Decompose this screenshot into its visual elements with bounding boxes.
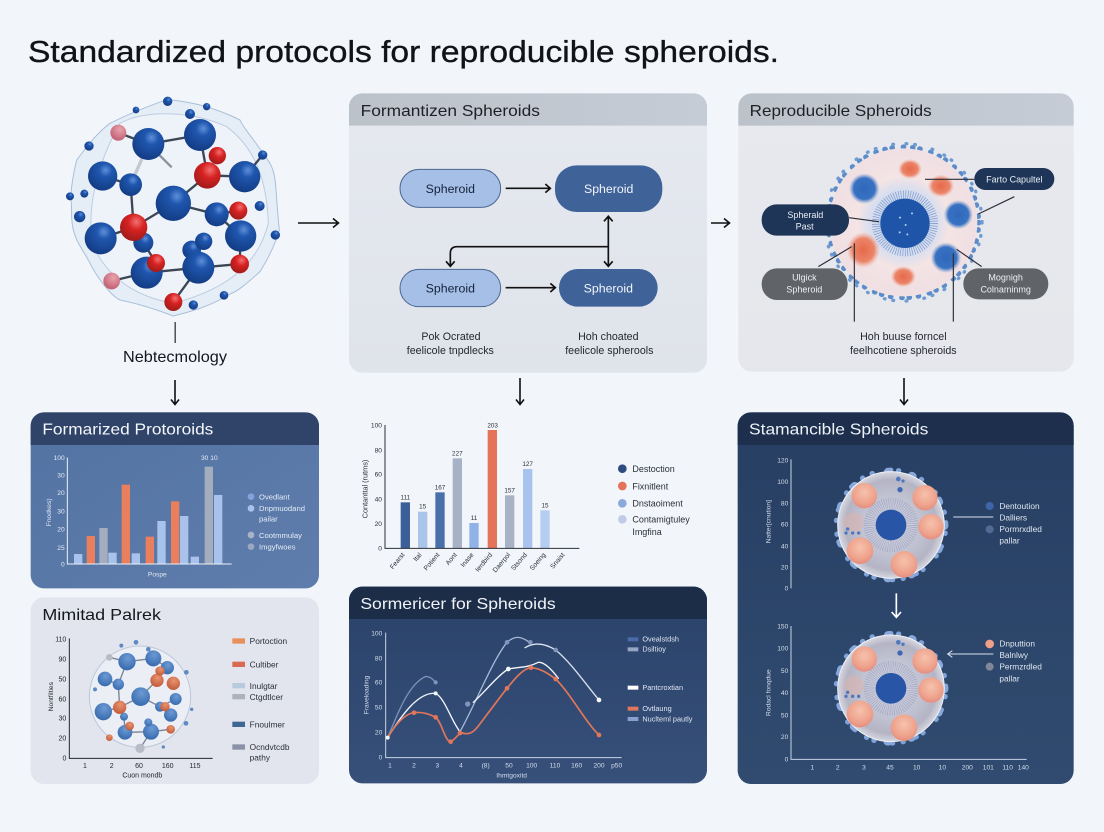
axes and labels: Snaist bbox=[549, 552, 567, 570]
callout: farto capultel: Farto Capultel bbox=[986, 174, 1043, 184]
lower chart axes: 150 bbox=[777, 623, 789, 630]
legend bbox=[232, 636, 290, 763]
axes and labels bbox=[361, 423, 579, 574]
legend: Ovealstdsh bbox=[642, 635, 679, 644]
axes and labels: 40 bbox=[375, 496, 382, 503]
node: spheroid top right bbox=[555, 165, 662, 212]
legend: Cootmmulay bbox=[259, 531, 302, 540]
legend: Ocndvtcdb bbox=[250, 742, 290, 752]
line chart: 2 bbox=[412, 762, 416, 769]
lower chart axes: 20 bbox=[781, 734, 789, 741]
node: spheroid bottom right: Spheroid bbox=[584, 281, 633, 295]
callout: spheroid past bbox=[762, 204, 849, 236]
legend bbox=[618, 464, 690, 537]
callout: spheroid past: Past bbox=[796, 222, 814, 232]
upper chart axis: Natter[cnution] bbox=[765, 500, 772, 543]
legend: Fixnitlent bbox=[632, 481, 669, 491]
callout: farto capultel bbox=[974, 168, 1054, 190]
panel: sormericer for spheroids bbox=[349, 587, 707, 783]
legend: pathy bbox=[250, 753, 271, 763]
upper legend: pallar bbox=[999, 535, 1020, 545]
node: spheroid top left: Spheroid bbox=[426, 182, 475, 196]
lower chart axes: Rodacl fonqdue bbox=[765, 669, 772, 716]
axes and labels: Ierdbird bbox=[474, 552, 494, 574]
node: spheroid top left bbox=[400, 169, 501, 207]
axes and labels: 157 bbox=[504, 487, 515, 494]
node: spheroid bottom left bbox=[400, 269, 501, 307]
upper chart axis: 40 bbox=[781, 543, 789, 550]
lower chart axes: 1 bbox=[810, 765, 814, 772]
upper chart axis: 60 bbox=[781, 522, 789, 529]
chart with molecule bbox=[48, 637, 213, 779]
upper chart axis: 20 bbox=[781, 565, 789, 572]
line chart: 200 bbox=[593, 762, 605, 769]
line chart: 100 bbox=[526, 762, 538, 769]
chart with molecule: 110 bbox=[55, 637, 66, 644]
callout: ulgick spheroid: Ulgick bbox=[792, 273, 817, 283]
label: nanotechnology: Nebtecmology bbox=[123, 349, 227, 366]
arrow: reproducible panel down bbox=[900, 378, 908, 404]
upper chart axis: 0 bbox=[785, 586, 789, 593]
blue spheres bbox=[66, 97, 280, 310]
bar chart: 0 bbox=[61, 561, 65, 568]
lower chart axes: 110 bbox=[1002, 765, 1013, 772]
bars bbox=[401, 430, 550, 548]
upper legend: Dentoution bbox=[999, 501, 1040, 511]
axes and labels: Ital bbox=[412, 551, 424, 563]
line chart: 3 bbox=[435, 762, 439, 769]
chart with molecule: 20 bbox=[59, 736, 66, 743]
lower chart axes: 45 bbox=[886, 765, 894, 772]
panel: formantizen spheroids bbox=[349, 93, 707, 373]
callout: ulgick spheroid bbox=[762, 268, 848, 300]
chart with molecule: Cuon mondb bbox=[122, 772, 162, 779]
arrow: molecule to protocol panel bbox=[298, 218, 338, 228]
legend bbox=[628, 635, 693, 723]
upper chart axis: 80 bbox=[781, 501, 789, 508]
legend: pailar bbox=[259, 515, 278, 524]
axes and labels: 15 bbox=[541, 502, 549, 509]
bar chart: 100 bbox=[54, 455, 65, 462]
line chart: p50 bbox=[611, 762, 623, 769]
caption left bbox=[407, 331, 494, 357]
lower legend: pallar bbox=[999, 673, 1020, 683]
bar chart: 20 bbox=[57, 490, 65, 497]
line chart: 1 bbox=[388, 762, 392, 769]
lower spheroid bbox=[836, 633, 946, 743]
legend: Inulgtar bbox=[250, 681, 278, 691]
legend: Ctgdtlcer bbox=[250, 692, 283, 702]
bar chart bbox=[46, 455, 232, 579]
chart with molecule: 0 bbox=[62, 756, 66, 763]
chart with molecule: 50 bbox=[59, 676, 66, 683]
line chart: (8) bbox=[482, 762, 490, 769]
axes and labels: 80 bbox=[375, 447, 382, 454]
lower chart axes: 0 bbox=[785, 757, 789, 764]
line chart: 20 bbox=[375, 730, 383, 737]
caption left: feelicole tnpdlecks bbox=[407, 345, 494, 357]
axes and labels: 0 bbox=[378, 546, 382, 553]
line chart: 160 bbox=[571, 762, 583, 769]
line chart: 4 bbox=[459, 762, 463, 769]
axes and labels: Daerpol bbox=[492, 551, 513, 574]
caption right: feelicole spherools bbox=[565, 345, 653, 357]
upper legend: Pormrxdled bbox=[999, 524, 1042, 534]
line chart: 110 bbox=[550, 762, 561, 769]
caption: feelhcotiene spheroids bbox=[850, 345, 957, 357]
legend: Fnoulmer bbox=[250, 720, 285, 730]
lower chart axes: 10 bbox=[939, 765, 946, 772]
heading: Formantizen Spheroids bbox=[361, 103, 540, 120]
callout: ulgick spheroid: Spheroid bbox=[786, 285, 822, 295]
arrow: protocol panel to reproducible panel bbox=[711, 218, 730, 228]
line chart: Fraveloading bbox=[363, 675, 370, 714]
legend: Imgfina bbox=[632, 527, 662, 537]
chart with molecule: 90 bbox=[59, 656, 66, 663]
line chart bbox=[363, 631, 623, 779]
chart with molecule: Nontfilties bbox=[48, 681, 55, 711]
axes and labels: Aont bbox=[445, 552, 459, 567]
lower legend bbox=[948, 639, 1042, 683]
line chart: 60 bbox=[375, 680, 383, 687]
axes and labels: Stsond bbox=[510, 552, 529, 572]
bar chart: 30 bbox=[57, 508, 65, 515]
callout: mognigh colnaminmg: Mognigh bbox=[988, 273, 1023, 283]
line chart: 0 bbox=[379, 755, 383, 762]
upper legend: Dalliers bbox=[999, 513, 1027, 523]
membrane bbox=[71, 99, 279, 316]
caption right: Hoh choated bbox=[578, 331, 639, 343]
upper legend bbox=[953, 501, 1042, 545]
node: spheroid bottom right bbox=[559, 269, 658, 307]
legend bbox=[248, 492, 305, 552]
chart with molecule: 60 bbox=[135, 763, 143, 770]
bar chart: 30 10 bbox=[201, 455, 218, 462]
line chart: Ihmtgoxitd bbox=[496, 772, 527, 779]
caption left: Pok Ocrated bbox=[421, 331, 481, 343]
bar chart: 30 bbox=[57, 472, 65, 479]
legend: Imgyfwoes bbox=[259, 543, 296, 552]
upper chart axis: 100 bbox=[777, 479, 789, 486]
node: spheroid bottom left: Spheroid bbox=[426, 281, 475, 295]
lower chart axes: 140 bbox=[1018, 765, 1029, 772]
callout: spheroid past: Spherald bbox=[787, 210, 823, 220]
legend: Pantcroxtian bbox=[642, 683, 683, 692]
lower chart axes: 100 bbox=[777, 646, 789, 653]
legend: Portoction bbox=[250, 636, 288, 646]
heading: Stamancible Spheroids bbox=[749, 421, 929, 438]
axes and labels: Contanttal (rutms) bbox=[361, 460, 370, 518]
legend: Dnpmuodand bbox=[259, 504, 305, 513]
chart with molecule: 160 bbox=[162, 763, 174, 770]
line chart: 80 bbox=[375, 656, 383, 663]
axes and labels: 227 bbox=[452, 450, 463, 457]
illustration: spheroid cross-section bbox=[825, 144, 982, 301]
bar chart: 25 bbox=[57, 545, 65, 552]
callout: mognigh colnaminmg: Colnaminmg bbox=[980, 285, 1031, 295]
lower chart axes: 10 bbox=[913, 765, 921, 772]
connector: molecule to label bbox=[174, 322, 176, 343]
callout: mognigh colnaminmg bbox=[963, 268, 1048, 299]
axes and labels: 100 bbox=[371, 423, 382, 430]
panel: reproducible spheroids bbox=[738, 93, 1074, 372]
axes and labels: Soeing bbox=[529, 552, 548, 572]
upper spheroid bbox=[836, 470, 946, 580]
upper chart axis: 120 bbox=[777, 457, 789, 464]
lower chart axes bbox=[765, 623, 1029, 772]
lower chart axes: 200 bbox=[962, 765, 973, 772]
caption: Hoh buuse forncel bbox=[860, 331, 947, 343]
lower chart axes: 101 bbox=[983, 765, 994, 772]
axes and labels: 167 bbox=[435, 484, 446, 491]
arrow: between spheroids bbox=[892, 593, 901, 617]
axes and labels: Inase bbox=[460, 552, 476, 569]
illustration: nanotechnology molecule bbox=[66, 97, 280, 316]
chart with molecule: 60 bbox=[59, 696, 66, 703]
heading: Formarized Protoroids bbox=[42, 421, 214, 438]
panel: mimitad palrek bbox=[31, 597, 319, 784]
node: spheroid top right: Spheroid bbox=[584, 182, 633, 196]
legend: Ovtlaung bbox=[642, 704, 672, 713]
lower chart axes: 2 bbox=[836, 765, 840, 772]
legend: Cultiber bbox=[250, 660, 279, 670]
red spheres bbox=[120, 147, 249, 311]
axes and labels: 127 bbox=[522, 461, 533, 468]
legend: Destoction bbox=[632, 464, 675, 474]
axes and labels: Fearst bbox=[389, 552, 407, 571]
panel: stamancible spheroids bbox=[738, 412, 1074, 784]
bar chart: 20 bbox=[57, 527, 65, 534]
caption right bbox=[565, 331, 653, 357]
leader lines bbox=[818, 179, 1014, 322]
lower chart axes: 3 bbox=[862, 765, 866, 772]
heading: Mimitad Palrek bbox=[42, 607, 162, 624]
line chart: 100 bbox=[371, 631, 383, 638]
lower chart axes: 40 bbox=[781, 690, 789, 697]
axes and labels: 111 bbox=[401, 494, 411, 501]
bar chart: center bbox=[361, 423, 690, 574]
bar chart: Pospe bbox=[148, 572, 167, 579]
lower legend: Balnlwy bbox=[999, 650, 1029, 660]
legend: Dnstaoiment bbox=[632, 499, 683, 509]
legend: Contamigtuley bbox=[632, 515, 690, 525]
axes and labels: Potient bbox=[423, 552, 442, 572]
legend: Ovedlant bbox=[259, 492, 291, 501]
heading: Reproducible Spheroids bbox=[750, 103, 932, 120]
bar chart: Fnodkes) bbox=[46, 498, 53, 526]
chart with molecule: 2 bbox=[110, 763, 114, 770]
legend: Dsiltioy bbox=[642, 645, 666, 654]
panel: formarized protoroids bbox=[31, 412, 319, 588]
chart with molecule: 115 bbox=[189, 763, 201, 770]
axes and labels: 11 bbox=[471, 515, 478, 522]
axes and labels: 15 bbox=[419, 504, 427, 511]
arrow: molecule to down bbox=[171, 380, 179, 404]
bonds bbox=[101, 133, 263, 302]
chart with molecule: 1 bbox=[83, 763, 87, 770]
lower chart axes: 50 bbox=[781, 712, 789, 719]
arrow: protocol panel down bbox=[516, 378, 524, 404]
axes and labels: 203 bbox=[487, 423, 498, 430]
chart with molecule: 30 bbox=[59, 716, 66, 723]
title: Standardized protocols for reproducible spheroids. bbox=[28, 34, 779, 69]
lower legend: Dnputtion bbox=[999, 639, 1035, 649]
heading: Sormericer for Spheroids bbox=[360, 596, 556, 613]
caption bbox=[850, 331, 957, 357]
line chart: 50 bbox=[505, 762, 513, 769]
lower chart axes: 50 bbox=[781, 668, 789, 675]
legend: Nuclteml pautly bbox=[642, 714, 693, 723]
axes and labels: 20 bbox=[375, 521, 382, 528]
lower legend: Permzrdled bbox=[999, 661, 1042, 671]
arrows between nodes bbox=[446, 184, 613, 292]
axes and labels: 60 bbox=[375, 472, 382, 479]
line chart: 50 bbox=[375, 705, 383, 712]
upper chart axis bbox=[765, 457, 791, 593]
